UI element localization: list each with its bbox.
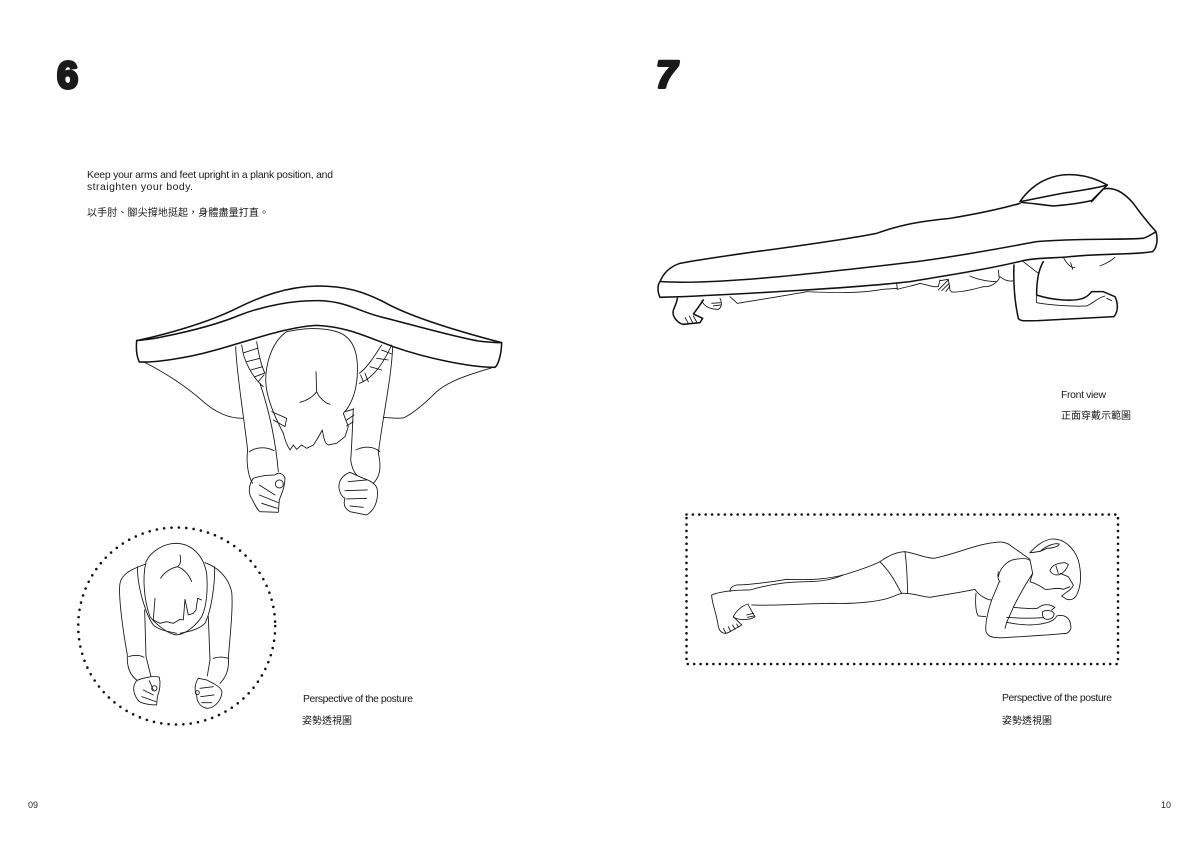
caption right: Perspective of the posture <box>1002 693 1112 704</box>
blanket edges <box>145 363 493 418</box>
instruction text: straighten your body. <box>87 182 193 193</box>
feet <box>673 298 721 324</box>
caption left: Perspective of the posture <box>303 694 413 705</box>
step number 7: 7 <box>656 54 679 96</box>
perspective inset: circle <box>78 528 275 724</box>
perspective inset: rectangle <box>686 514 1118 664</box>
figure from front <box>120 543 232 708</box>
arms <box>236 347 393 483</box>
caption left: 姿勢透視圖 <box>302 712 352 727</box>
page number 09: 09 <box>28 800 38 810</box>
shoulder straps <box>242 342 392 427</box>
right fist <box>339 472 377 515</box>
illustration: side view of plank under mattress <box>658 175 1157 324</box>
caption front view <box>1061 390 1131 422</box>
figure from the side: head and arms <box>975 539 1081 638</box>
figure from the side: legs and torso <box>712 542 1008 633</box>
caption right: 姿勢透視圖 <box>1002 712 1052 727</box>
pillow <box>1020 175 1107 206</box>
instruction text: 以手肘、腳尖撐地挺起，身體盡量打直。 <box>87 204 269 219</box>
caption front view: Front view <box>1061 390 1106 401</box>
head <box>266 329 357 450</box>
mattress <box>136 286 502 367</box>
instruction text <box>87 170 333 219</box>
illustration: front view of plank under mattress <box>136 286 502 515</box>
mattress <box>658 188 1157 297</box>
caption left <box>302 694 413 727</box>
caption right <box>1002 693 1112 727</box>
dotted rectangle frame <box>686 514 1118 664</box>
left fist <box>249 473 285 512</box>
step number 6: 6 <box>57 55 78 97</box>
caption front view: 正面穿戴示範圖 <box>1061 407 1131 422</box>
forearm and fist <box>1014 262 1117 321</box>
instruction text: Keep your arms and feet upright in a plank position, and <box>87 170 333 181</box>
body under mattress <box>730 257 1115 303</box>
page number 10: 10 <box>1161 800 1171 810</box>
dotted circle frame <box>78 528 275 724</box>
